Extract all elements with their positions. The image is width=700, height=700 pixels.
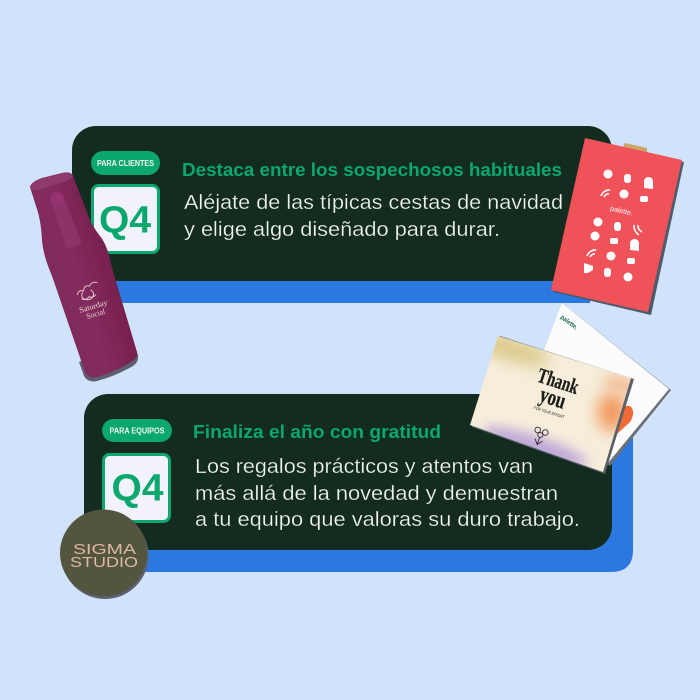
heading: equipos: Finaliza el año con gratitud <box>193 422 441 442</box>
badge shadow <box>62 512 148 599</box>
badge label <box>70 542 138 571</box>
icon: purple bottle <box>30 172 138 381</box>
card shadow <box>472 336 634 474</box>
pill: para equipos: PARA EQUIPOS <box>110 426 165 436</box>
Q4 badge: clientes: Q4 <box>99 200 151 242</box>
pill: para clientes <box>91 151 160 175</box>
dark card: equipos <box>84 394 612 550</box>
thank you text: FOR YOUR EFFORT <box>533 405 566 420</box>
Q4 badge: equipos <box>104 454 170 522</box>
notebook shadow <box>553 140 684 315</box>
notebook pattern: palette. <box>609 206 633 218</box>
bottle logo: Saturday <box>78 298 108 315</box>
bottle button <box>50 192 64 206</box>
bottle strap <box>52 199 81 248</box>
thank you text <box>528 363 582 421</box>
notebook tab <box>623 143 647 153</box>
notebook pattern <box>584 170 653 282</box>
blue backing bar: clientes <box>100 240 590 303</box>
heading: clientes: Destaca entre los sospechosos habituales <box>182 160 562 180</box>
thank you text: you <box>537 382 569 414</box>
postcard shadow <box>528 303 671 466</box>
icon: white postcard <box>526 303 671 466</box>
pill: para clientes: PARA CLIENTES <box>97 159 155 168</box>
icon: thank you card <box>470 336 634 474</box>
blue backing bar: equipos <box>110 420 633 572</box>
body text: equipos: a tu equipo que valoras su duro trabajo. <box>195 508 580 531</box>
badge label: SIGMA <box>73 542 136 558</box>
body text: equipos: Los regalos prácticos y atentos van <box>195 455 533 478</box>
bottle base <box>79 343 138 381</box>
body text: equipos: más allá de la novedad y demuestran <box>195 482 558 505</box>
card flower emblem <box>531 426 549 447</box>
card gradient face <box>470 336 631 472</box>
body text: clientes <box>184 191 563 241</box>
badge disc <box>60 510 147 596</box>
bottle body <box>30 172 137 377</box>
body text: clientes: y elige algo diseñado para durar. <box>184 218 500 241</box>
panel: para clientes <box>72 126 612 303</box>
badge: sigma studio <box>60 510 148 599</box>
icon: red notebook <box>551 138 684 315</box>
bottle cap top <box>30 172 73 190</box>
Q4 badge: equipos: Q4 <box>112 468 164 510</box>
bottle logo <box>73 280 111 322</box>
dark card: clientes <box>72 126 612 281</box>
postcard label: palette. <box>559 314 579 332</box>
bottle logo: Social <box>85 307 107 321</box>
notebook cover <box>551 138 682 312</box>
postcard face <box>526 303 669 463</box>
body text: equipos <box>195 455 580 531</box>
thank you text: Thank <box>535 363 582 399</box>
panel: para equipos <box>84 394 633 572</box>
pill: para equipos <box>102 419 172 442</box>
body text: clientes: Aléjate de las típicas cestas de navidad <box>184 191 563 214</box>
badge label: STUDIO <box>70 555 138 571</box>
Q4 badge: clientes <box>92 186 158 252</box>
postcard orange shape <box>612 406 633 434</box>
